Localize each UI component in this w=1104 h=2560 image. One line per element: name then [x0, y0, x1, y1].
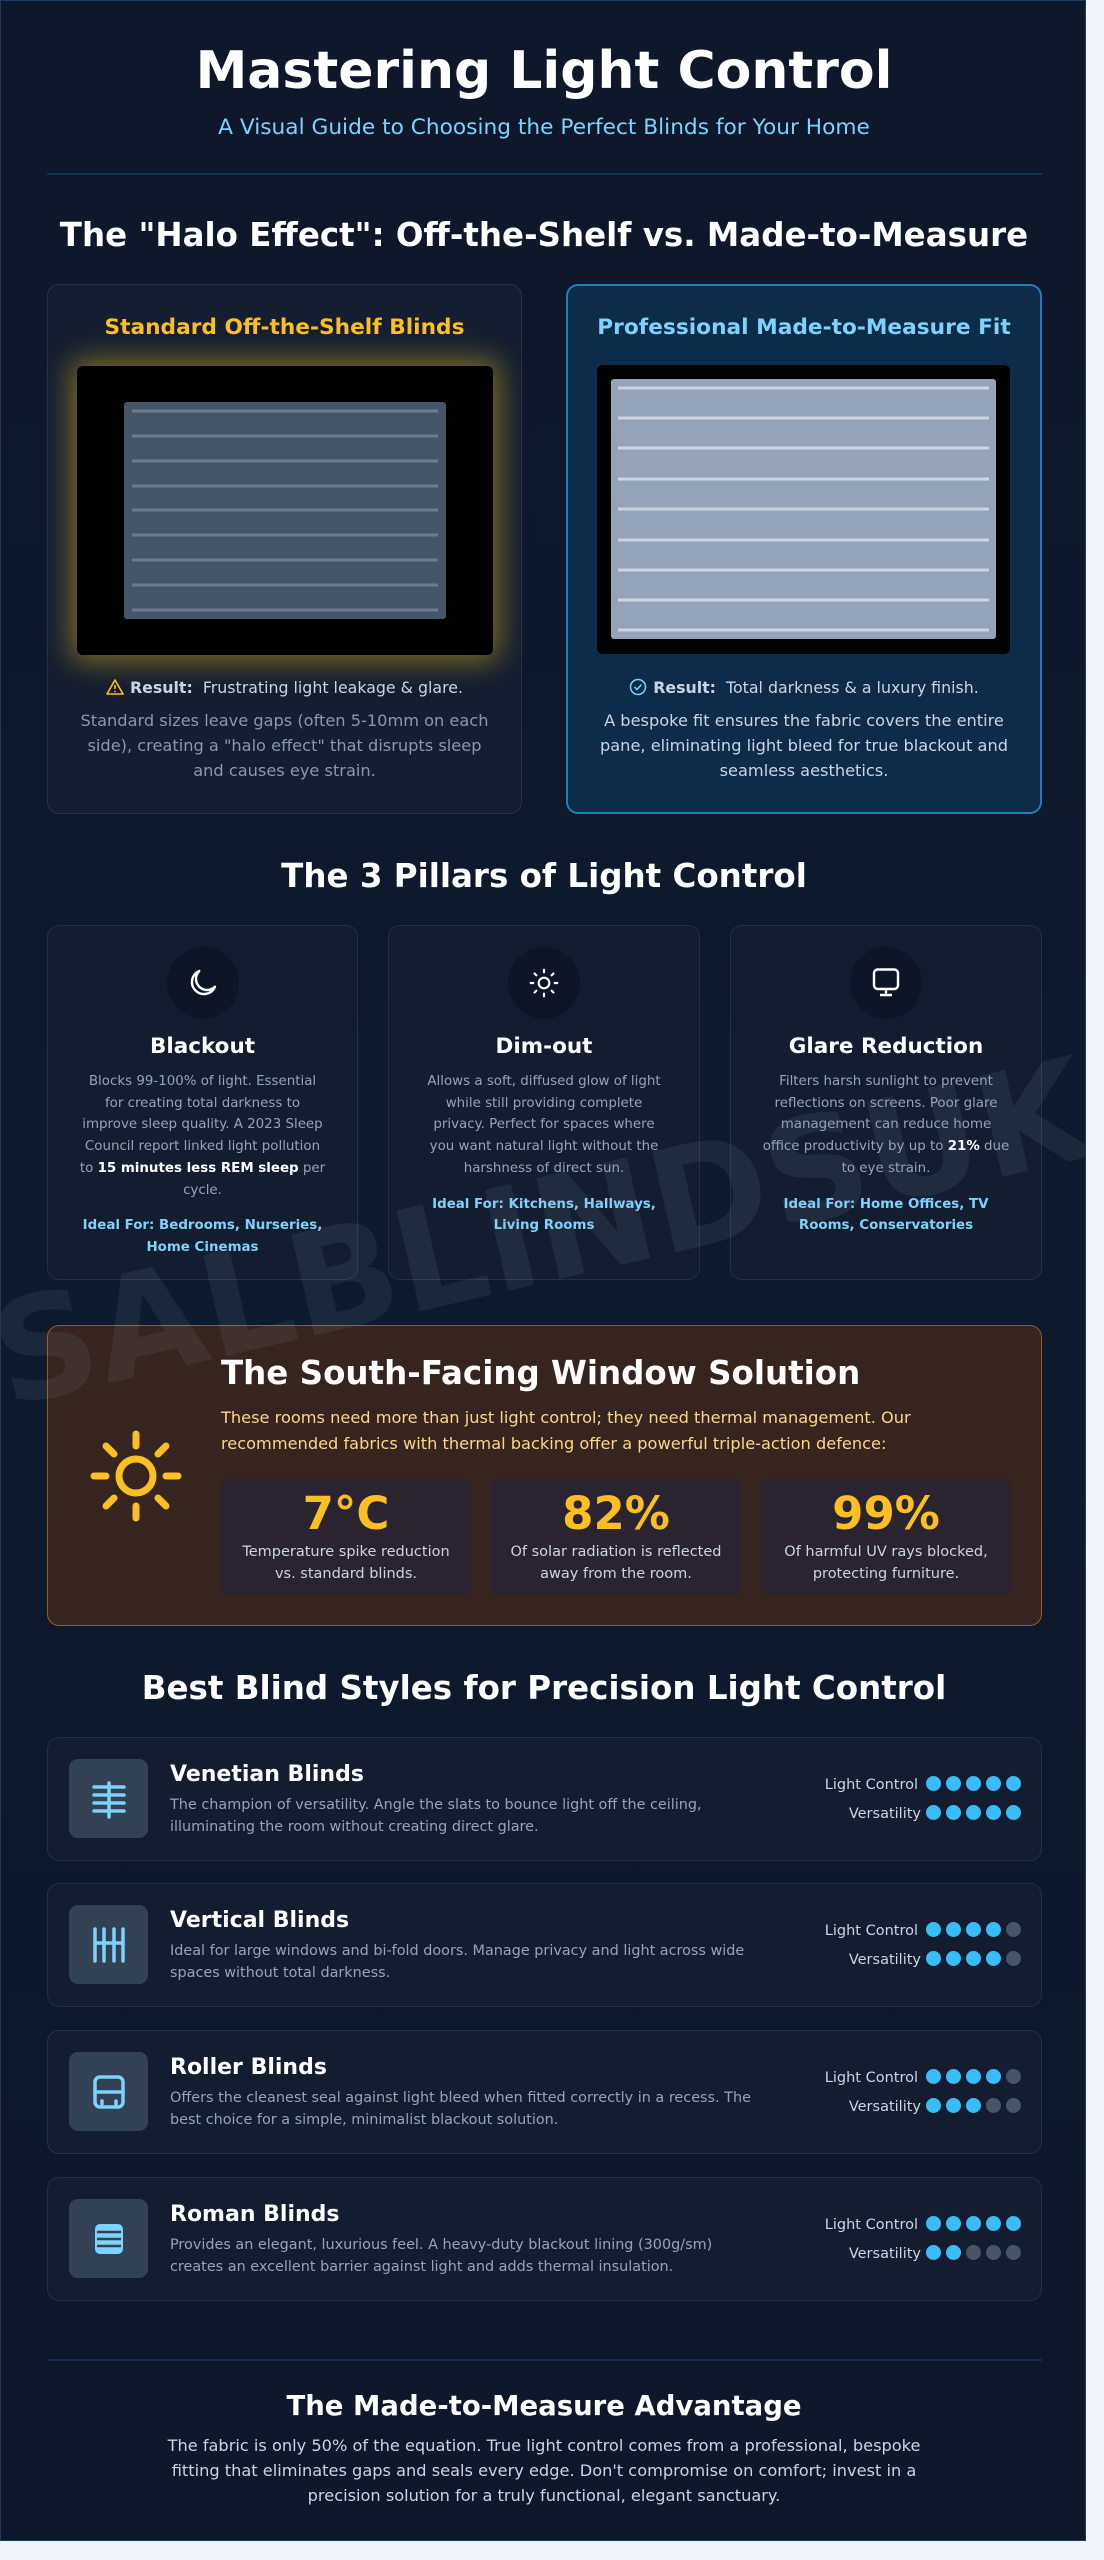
desc: Provides an elegant, luxurious feel. A heavy-duty blackout lining (300g/sm) — [170, 2237, 712, 2253]
result line: Result: Total darkness & a luxury finish. — [653, 678, 979, 697]
icon: monitor — [850, 947, 922, 1019]
description: and causes eye strain. — [193, 761, 376, 780]
footer text: precision solution for a truly functional, elegant sanctuary. — [308, 2486, 780, 2505]
card title: Standard Off-the-Shelf Blinds — [104, 315, 464, 340]
footer text: The fabric is only 50% of the equation. True light control comes from a professional, bespoke — [168, 2436, 920, 2455]
icon: roman — [69, 2199, 148, 2278]
pillar text: while still providing complete — [446, 1096, 642, 1111]
stat: 99%: protecting furniture. — [813, 1566, 959, 1582]
pillar title: Blackout — [150, 1034, 255, 1059]
icon: sun — [508, 947, 580, 1019]
pillar title: Dim-out — [496, 1034, 592, 1059]
pillar text: Allows a soft, diffused glow of light — [427, 1074, 661, 1089]
pillar text — [80, 1074, 326, 1255]
section text — [220, 1408, 911, 1453]
pillar text: Ideal For: Home Offices, TV — [783, 1197, 989, 1212]
heading: halo effect: The "Halo Effect": Off-the-Shelf vs. Made-to-Measure — [60, 216, 1028, 254]
name: Roman Blinds — [170, 2202, 340, 2227]
pillar title: Glare Reduction — [789, 1034, 983, 1059]
ratings: Versatility — [849, 1806, 921, 1822]
pillar text: Ideal For: Bedrooms, Nurseries, — [83, 1218, 322, 1233]
stat: 7C: vs. standard blinds. — [275, 1566, 417, 1582]
desc: best choice for a simple, minimalist blackout solution. — [170, 2112, 558, 2128]
stat: 7C: Temperature spike reduction — [242, 1544, 450, 1560]
row: venetian — [47, 1737, 1042, 1861]
pillar text: Rooms, Conservatories — [799, 1218, 973, 1233]
heading: blind styles: Best Blind Styles for Precision Light Control — [142, 1669, 946, 1707]
pillar text: Living Rooms — [494, 1218, 594, 1233]
card title: Professional Made-to-Measure Fit — [597, 315, 1011, 340]
desc: Offers the cleanest seal against light bleed when fitted correctly in a recess. The — [170, 2090, 751, 2106]
pillar text — [427, 1074, 661, 1233]
subtitle: A Visual Guide to Choosing the Perfect Blinds for Your Home — [218, 115, 870, 140]
pillar text: Home Cinemas — [146, 1240, 259, 1255]
window with halo — [77, 366, 493, 655]
pillar text: you want natural light without the — [430, 1139, 658, 1154]
ratings: Versatility — [849, 2246, 921, 2262]
pillar text: for creating total darkness to — [105, 1096, 300, 1111]
desc — [170, 1943, 744, 1981]
ratings: Light Control — [825, 2217, 918, 2233]
description: pane, eliminating light bleed for true blackout and — [600, 736, 1008, 755]
stat: 82%: Of solar radiation is reflected — [510, 1544, 721, 1560]
section title: The South-Facing Window Solution — [221, 1354, 860, 1392]
ratings — [825, 1922, 1021, 1968]
panel: glare reduction — [730, 925, 1042, 1280]
panel: off-the-shelf — [47, 284, 522, 814]
row: roller — [47, 2030, 1042, 2154]
blind small — [124, 402, 446, 619]
pillar text: Blocks 99-100% of light. Essential — [89, 1074, 316, 1089]
ratings: Versatility — [849, 2099, 921, 2115]
pillar text: Filters harsh sunlight to prevent — [779, 1074, 993, 1089]
desc: illuminating the room without creating direct glare. — [170, 1819, 539, 1835]
description — [600, 711, 1008, 780]
description: seamless aesthetics. — [720, 761, 888, 780]
pillar text: office productivity by up to 21% due — [763, 1139, 1009, 1154]
footer text: fitting that eliminates gaps and seals every edge. Don't compromise on comfort; invest in a — [172, 2461, 916, 2480]
name: Venetian Blinds — [170, 1762, 364, 1787]
pillar text: Council report linked light pollution — [85, 1139, 320, 1154]
desc: The champion of versatility. Angle the slats to bounce light off the ceiling, — [170, 1797, 702, 1813]
pillar text: to eye strain. — [842, 1161, 930, 1176]
pillar text: management can reduce home — [781, 1117, 991, 1132]
stat: 82% — [491, 1479, 741, 1595]
description — [80, 711, 488, 780]
row: roman — [47, 2177, 1042, 2301]
panel: dim-out — [388, 925, 700, 1280]
panel: blackout — [47, 925, 358, 1280]
desc: creates an excellent barrier against light and adds thermal insulation. — [170, 2259, 673, 2275]
description: A bespoke fit ensures the fabric covers the entire — [604, 711, 1004, 730]
ratings: Light Control — [825, 2070, 918, 2086]
name: Vertical Blinds — [170, 1908, 349, 1933]
icon: moon — [167, 947, 239, 1019]
blind full — [611, 379, 996, 639]
name: Roller Blinds — [170, 2055, 327, 2080]
pillar text: to 15 minutes less REM sleep per — [80, 1161, 325, 1176]
title: Mastering Light Control — [196, 41, 892, 101]
section text: These rooms need more than just light control; they need thermal management. Our — [221, 1408, 911, 1427]
description: side), creating a "halo effect" that disrupts sleep — [88, 736, 482, 755]
pillar text — [763, 1074, 1009, 1233]
stat: 99%: 99% — [832, 1487, 940, 1540]
pillar text: improve sleep quality. A 2023 Sleep — [82, 1117, 323, 1132]
stat: 7C — [221, 1479, 471, 1595]
stat: 7C: 7°C — [303, 1487, 389, 1540]
stat: 99% — [761, 1479, 1011, 1595]
icon: venetian — [69, 1759, 148, 1838]
footer text — [168, 2436, 920, 2505]
section text: recommended fabrics with thermal backing offer a powerful triple-action defence: — [221, 1434, 886, 1453]
ratings: Versatility — [849, 1952, 921, 1968]
icon: sun large — [90, 1430, 182, 1522]
desc: Ideal for large windows and bi-fold doors. Manage privacy and light across wide — [170, 1943, 744, 1959]
ratings — [825, 2216, 1021, 2262]
ratings — [825, 2069, 1021, 2115]
stat: 99%: Of harmful UV rays blocked, — [784, 1544, 988, 1560]
panel: south-facing — [47, 1325, 1042, 1626]
ratings: Light Control — [825, 1923, 918, 1939]
desc — [170, 2090, 751, 2128]
panel: made-to-measure — [566, 284, 1042, 814]
window fitted — [597, 365, 1010, 654]
description: Standard sizes leave gaps (often 5-10mm on each — [80, 711, 488, 730]
desc — [170, 1797, 702, 1835]
heading: advantage: The Made-to-Measure Advantage — [286, 2390, 802, 2422]
pillar text: privacy. Perfect for spaces where — [433, 1117, 655, 1132]
pillar text: reflections on screens. Poor glare — [775, 1096, 997, 1111]
desc: spaces without total darkness. — [170, 1965, 390, 1981]
stat: 82%: 82% — [562, 1487, 670, 1540]
pillar text: cycle. — [183, 1183, 222, 1198]
result line: Result: Frustrating light leakage & glare. — [130, 678, 463, 697]
row: vertical — [47, 1883, 1042, 2007]
ratings: Light Control — [825, 1777, 918, 1793]
icon: roller — [69, 2052, 148, 2131]
heading: 3 pillars: The 3 Pillars of Light Control — [281, 857, 807, 895]
icon: vertical — [69, 1905, 148, 1984]
pillar text: harshness of direct sun. — [464, 1161, 624, 1176]
pillar text: Ideal For: Kitchens, Hallways, — [432, 1197, 656, 1212]
desc — [170, 2237, 712, 2275]
ratings — [825, 1776, 1021, 1822]
stat: 82%: away from the room. — [540, 1566, 692, 1582]
